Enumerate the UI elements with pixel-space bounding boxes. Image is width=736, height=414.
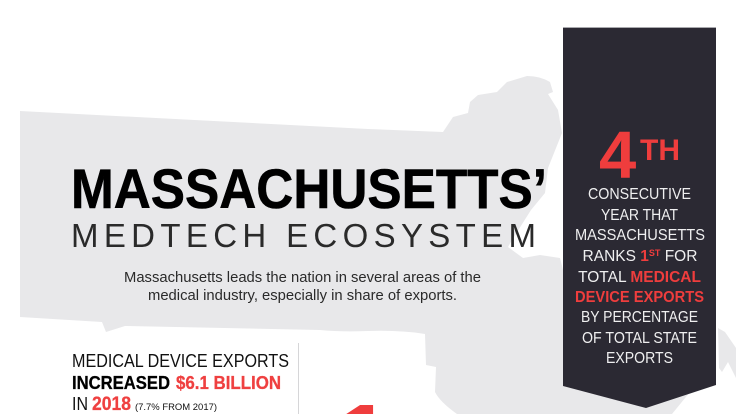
map of Massachusetts silhouette bbox=[20, 76, 736, 414]
panel description bbox=[575, 186, 705, 367]
panel description: DEVICE EXPORTS bbox=[575, 289, 704, 306]
title: MASSACHUSETTS’ bbox=[71, 157, 547, 220]
panel description: BY PERCENTAGE bbox=[581, 309, 698, 326]
statistic: medical device exports increase: MEDICAL DEVICE EXPORTS bbox=[72, 350, 289, 371]
panel description: FOR bbox=[660, 248, 697, 265]
panel: 4th consecutive year callout bbox=[563, 27, 716, 408]
statistic: medical device exports increase bbox=[72, 350, 289, 414]
intro paragraph: medical industry, especially in share of exports. bbox=[148, 287, 457, 304]
vertical divider bbox=[298, 343, 299, 414]
panel description: EXPORTS bbox=[606, 350, 673, 367]
panel description: OF TOTAL STATE bbox=[582, 330, 697, 347]
statistic: medical device exports increase: INCREASED bbox=[72, 372, 170, 393]
panel description: RANKS 1 bbox=[583, 248, 649, 265]
statistic: medical device exports increase: $6.1 BILLION bbox=[176, 372, 281, 393]
statistic: medical device exports increase: IN bbox=[72, 393, 88, 414]
panel description: MASSACHUSETTS bbox=[575, 227, 705, 244]
intro paragraph bbox=[124, 269, 481, 304]
panel description: ST bbox=[649, 248, 661, 258]
panel description: CONSECUTIVE bbox=[588, 186, 691, 203]
intro paragraph: Massachusetts leads the nation in several areas of the bbox=[124, 269, 481, 286]
title bbox=[71, 157, 547, 254]
subtitle: MEDTECH ECOSYSTEM bbox=[71, 217, 536, 254]
big number 4th: 4 bbox=[599, 118, 636, 193]
statistic: medical device exports increase: (7.7% FROM 2017) bbox=[135, 402, 217, 413]
big number 4th: TH bbox=[640, 134, 680, 167]
panel description: YEAR THAT bbox=[601, 207, 678, 224]
big number 4th bbox=[599, 118, 680, 193]
panel description: TOTAL MEDICAL bbox=[578, 269, 701, 286]
